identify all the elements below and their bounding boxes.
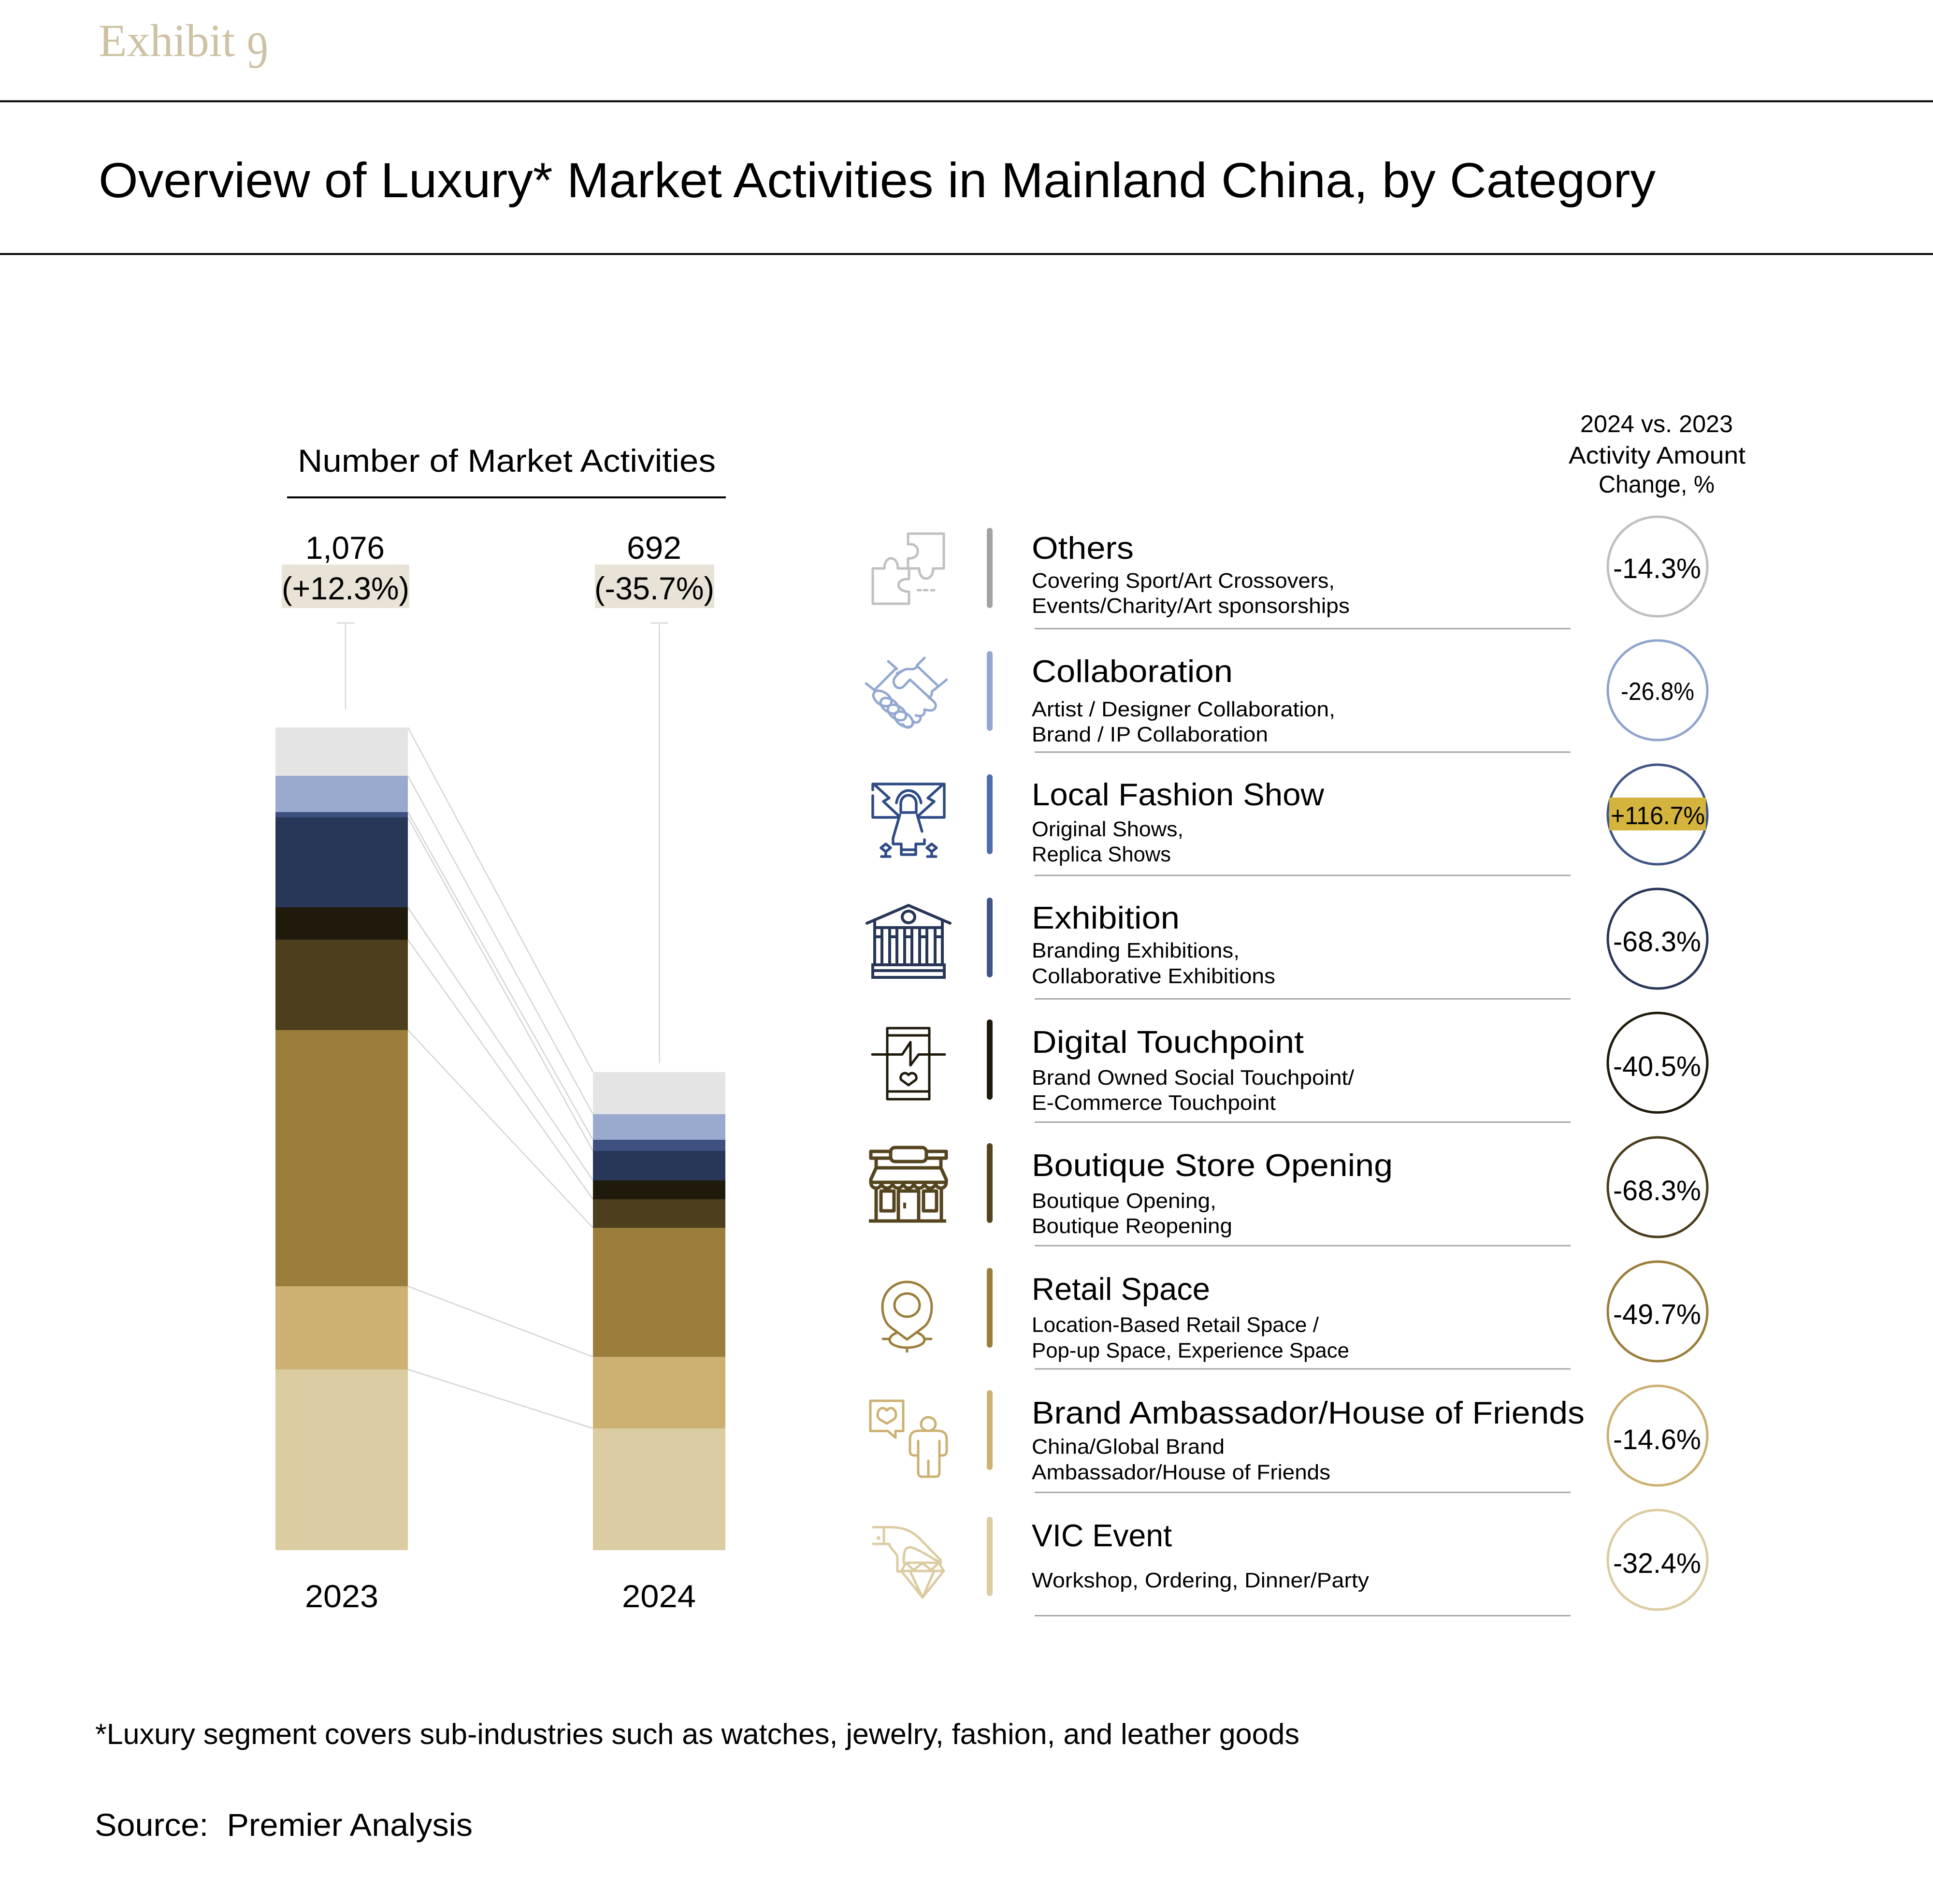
- icon: handshake: [866, 658, 947, 730]
- stacked bar 2024: [593, 1072, 725, 1550]
- description: Branding Exhibitions,: [1032, 939, 1240, 962]
- accent bar: [987, 1019, 993, 1100]
- change badge: -14.6%: [1613, 1424, 1701, 1455]
- 2023 total: 1,076: [305, 530, 385, 566]
- change badge: -49.7%: [1613, 1299, 1701, 1330]
- category title: Local Fashion Show: [1032, 777, 1325, 812]
- description: [1032, 1066, 1355, 1115]
- chart heading: Number of Market Activities: [298, 443, 716, 479]
- 2024 total: [594, 530, 714, 608]
- change badge: [1608, 517, 1707, 616]
- description: Location-Based Retail Space /: [1032, 1313, 1319, 1337]
- row: Brand Ambassador / House of Friends: [870, 1386, 1707, 1493]
- change badge: [1608, 1262, 1707, 1361]
- icon: puzzle: [873, 534, 944, 604]
- description: Brand Owned Social Touchpoint/: [1032, 1066, 1355, 1090]
- category title: Others: [1032, 530, 1134, 566]
- category title: Boutique Store Opening: [1032, 1148, 1393, 1183]
- accent bar: [987, 898, 993, 977]
- row: Others: [873, 517, 1707, 628]
- row: Exhibition: [867, 889, 1707, 999]
- change badge: -26.8%: [1621, 678, 1694, 706]
- category title: Digital Touchpoint: [1032, 1024, 1304, 1060]
- change badge: [1608, 1013, 1707, 1113]
- accent bar: [987, 1143, 993, 1223]
- description: E-Commerce Touchpoint: [1032, 1091, 1276, 1115]
- description: [1032, 939, 1275, 988]
- category title: Exhibition: [1032, 900, 1180, 935]
- description: Artist / Designer Collaboration,: [1032, 698, 1335, 721]
- change badge: [1608, 1510, 1707, 1610]
- 2023 total: (+12.3%): [282, 570, 409, 606]
- change badge with highlight: +116.7%: [1611, 802, 1705, 830]
- description: [1032, 1189, 1232, 1238]
- accent bar: [987, 528, 993, 608]
- description: Events/Charity/Art sponsorships: [1032, 594, 1350, 618]
- description: Ambassador/House of Friends: [1032, 1461, 1330, 1484]
- connector lines between bars: [408, 727, 593, 1428]
- axis label 2023: 2023: [305, 1578, 378, 1614]
- accent bar: [987, 651, 993, 731]
- category title: Brand Ambassador/House of Friends: [1032, 1395, 1585, 1430]
- accent bar: [987, 774, 993, 854]
- column header: change percent: 2024 vs. 2023: [1580, 410, 1733, 437]
- description: [1032, 1435, 1330, 1484]
- change badge: -32.4%: [1613, 1548, 1701, 1579]
- description: China/Global Brand: [1032, 1435, 1225, 1459]
- description: Brand / IP Collaboration: [1032, 723, 1268, 746]
- description: [1032, 1313, 1349, 1362]
- stacked bar 2023: [275, 727, 408, 1550]
- accent bar: [987, 1390, 993, 1470]
- row: Local Fashion Show: [873, 765, 1707, 875]
- description: Boutique Reopening: [1032, 1214, 1232, 1238]
- icon: hand holding diamond: [873, 1527, 944, 1598]
- description: [1032, 698, 1335, 746]
- change badge: [1608, 1137, 1707, 1237]
- accent bar: [987, 1268, 993, 1348]
- column header: change percent: Change, %: [1599, 471, 1715, 498]
- exhibit label: Exhibit: [99, 15, 235, 66]
- description: Boutique Opening,: [1032, 1189, 1216, 1213]
- axis label 2024: 2024: [622, 1578, 696, 1614]
- row: Digital Touchpoint: [872, 1013, 1707, 1122]
- change badge: -14.3%: [1613, 553, 1701, 584]
- row: Collaboration: [866, 640, 1707, 752]
- description: Workshop, Ordering, Dinner/Party: [1032, 1569, 1369, 1592]
- change badge with highlight: [1608, 765, 1707, 864]
- column header: change percent: Activity Amount: [1569, 442, 1745, 469]
- description: [1032, 569, 1350, 618]
- panel: number of market activities chart: [275, 443, 726, 1614]
- description: Collaborative Exhibitions: [1032, 964, 1275, 988]
- exhibit label: 9: [247, 22, 268, 79]
- 2024 total: 692: [627, 530, 681, 566]
- 2024 total: (-35.7%): [594, 570, 714, 606]
- category title: VIC Event: [1032, 1518, 1172, 1553]
- accent bar: [987, 1517, 993, 1596]
- row: VIC Event: [873, 1510, 1707, 1615]
- row: Boutique Store Opening: [869, 1137, 1707, 1246]
- icon: storefront: [869, 1148, 946, 1221]
- row: Retail Space: [882, 1262, 1707, 1369]
- 2023 total: [282, 530, 409, 608]
- total leader lines: [337, 623, 668, 1063]
- source: Source: Premier Analysis: [95, 1807, 473, 1843]
- title: Overview of Luxury* Market Activities in Mainland China, by Category: [99, 153, 1656, 208]
- change badge: -68.3%: [1613, 926, 1701, 958]
- change badge: -68.3%: [1613, 1175, 1701, 1206]
- change badge: [1608, 1386, 1707, 1485]
- footnote: *Luxury segment covers sub-industries such as watches, jewelry, fashion, and leather goods: [95, 1718, 1299, 1750]
- icon: phone with heartbeat: [872, 1028, 945, 1099]
- icon: fashion runway: [873, 784, 944, 857]
- change badge: [1608, 640, 1707, 740]
- description: Pop-up Space, Experience Space: [1032, 1339, 1349, 1362]
- description: Replica Shows: [1032, 843, 1171, 866]
- description: Covering Sport/Art Crossovers,: [1032, 569, 1335, 593]
- icon: person with heart speech bubble: [870, 1401, 947, 1477]
- change badge: [1608, 889, 1707, 988]
- icon: museum: [867, 905, 950, 977]
- description: Original Shows,: [1032, 817, 1183, 841]
- change badge: -40.5%: [1613, 1051, 1701, 1082]
- category title: Collaboration: [1032, 654, 1233, 689]
- description: [1032, 817, 1183, 866]
- column header: change percent: [1569, 410, 1745, 498]
- icon: location pin: [882, 1282, 932, 1352]
- category title: Retail Space: [1032, 1271, 1210, 1307]
